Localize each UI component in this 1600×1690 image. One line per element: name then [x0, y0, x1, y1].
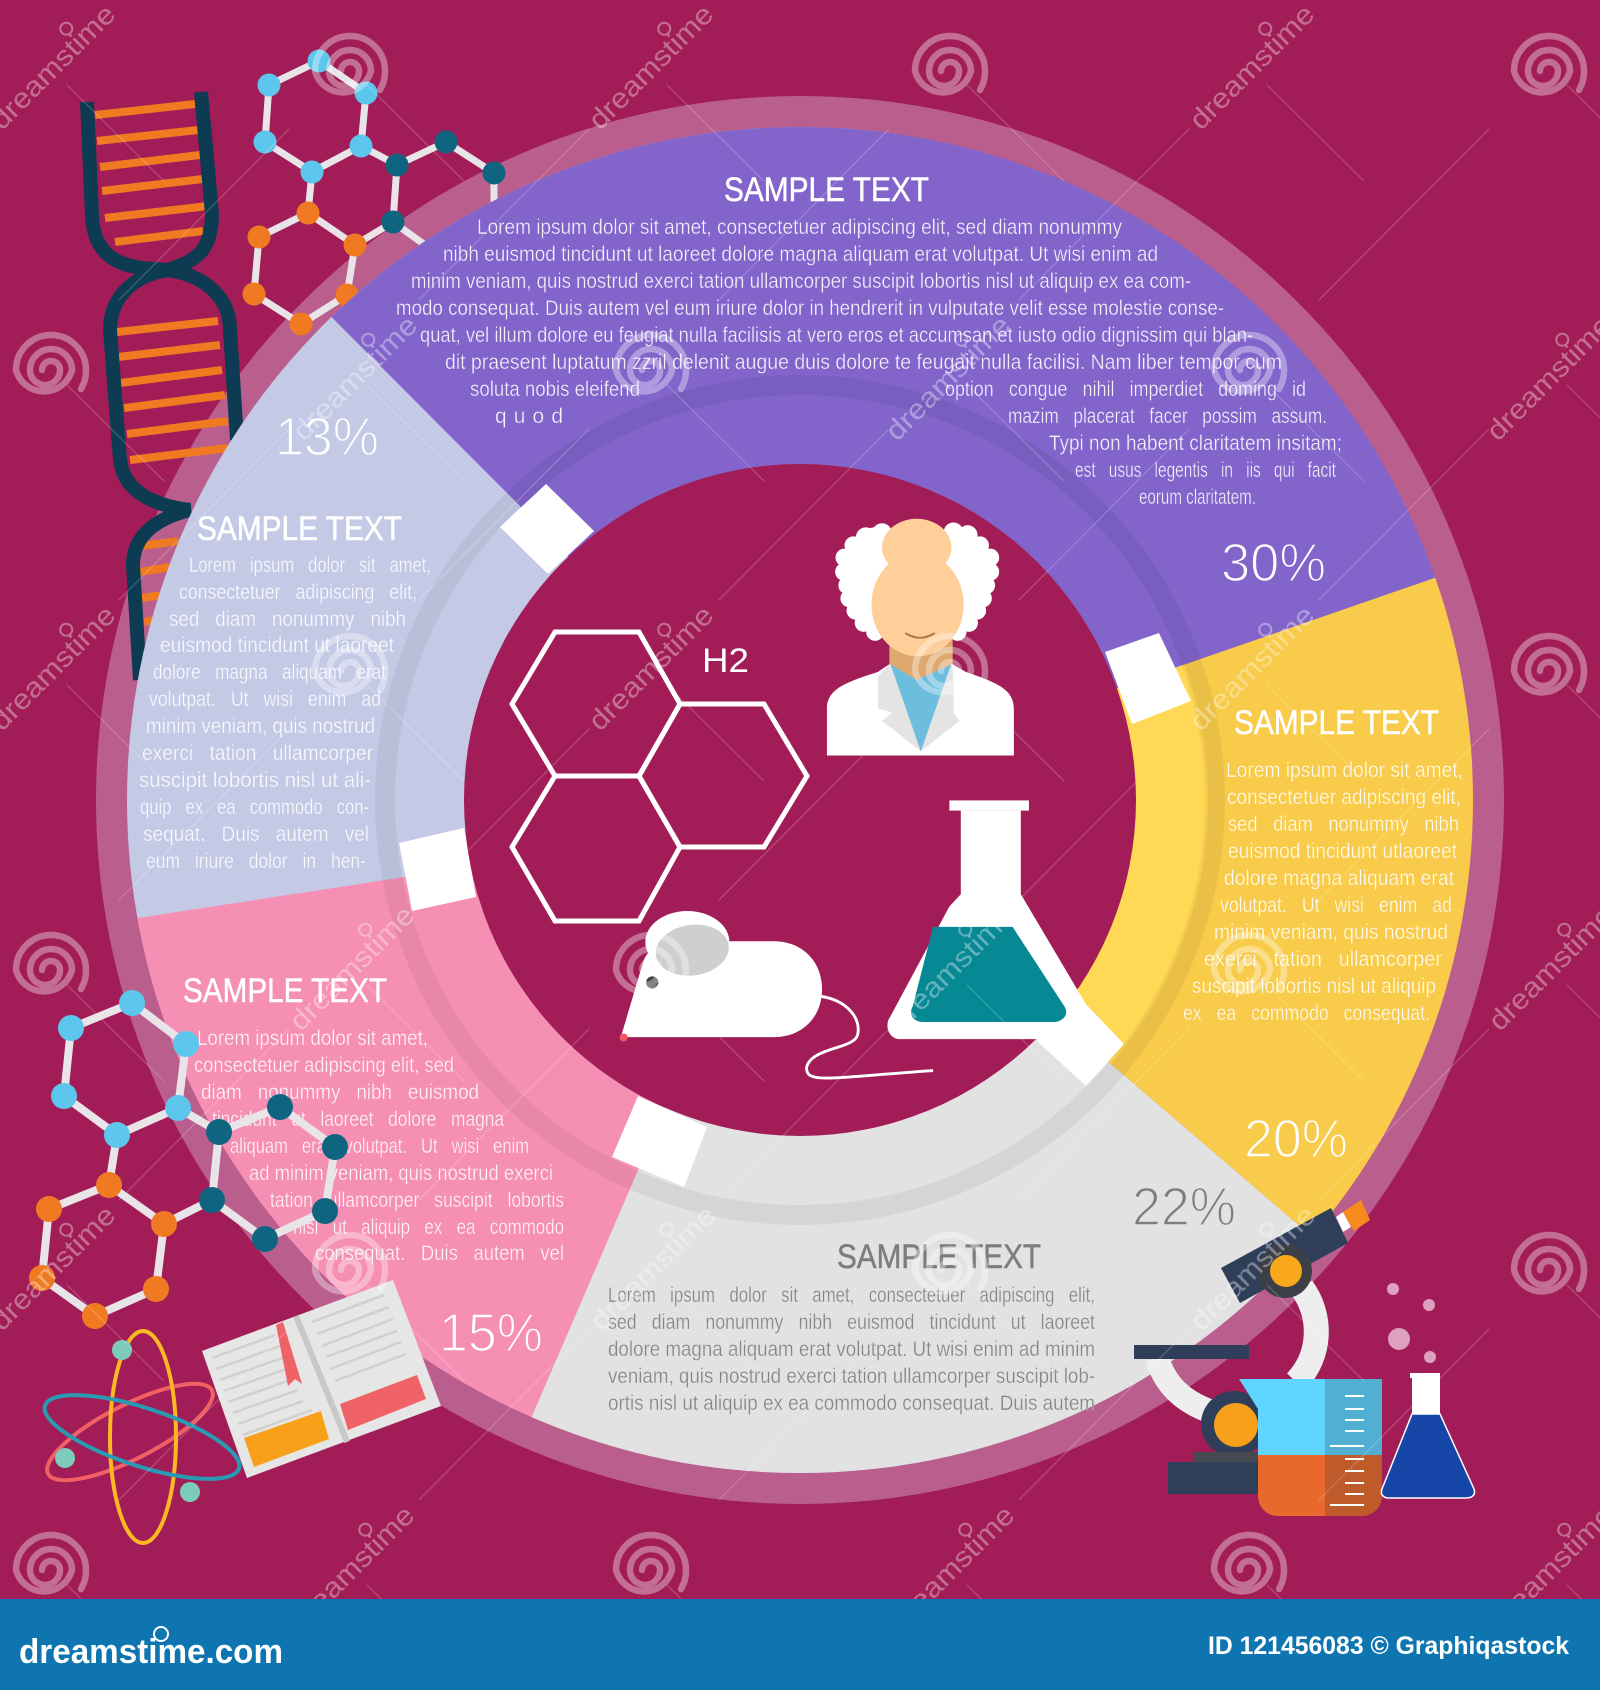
panel: yellow text	[1183, 704, 1463, 1169]
body text: eum iriure dolor in hen-	[146, 850, 366, 873]
body text: minim veniam, quis nostrud	[1214, 921, 1448, 944]
body text: consectetuer adipiscing elit,	[179, 581, 417, 604]
icon: book	[202, 1280, 441, 1478]
body text: ad minim veniam, quis nostrud exerci	[249, 1162, 553, 1185]
body text: nisl ut aliquip ex ea commodo	[293, 1216, 564, 1239]
body text: suscipit lobortis nisl ut aliquip	[1192, 975, 1436, 998]
body text: dolore magna aliquam erat volutpat. Ut wisi enim ad minim	[608, 1338, 1095, 1361]
percentage 22%: 22%	[1132, 1177, 1236, 1237]
center circle	[464, 464, 1136, 1136]
body text: option congue nihil imperdiet doming id	[945, 378, 1306, 401]
percentage 20%: 20%	[1244, 1109, 1348, 1169]
heading: SAMPLE TEXT	[183, 972, 387, 1010]
segment: gray 22%	[532, 1039, 1299, 1473]
body text: Lorem ipsum dolor sit amet, consectetuer adipiscing elit,	[608, 1284, 1095, 1307]
body text: veniam, quis nostrud exerci tation ullamcorper suscipit lob-	[608, 1365, 1095, 1388]
body text: suscipit lobortis nisl ut ali-	[139, 769, 371, 792]
heading: SAMPLE TEXT	[724, 171, 929, 209]
panel: purple text	[396, 171, 1342, 593]
body text: dolore magna aliquam erat	[1224, 867, 1454, 890]
body text: est usus legentis in iis qui facit	[1075, 459, 1336, 482]
body text	[608, 1284, 1095, 1415]
body text	[194, 1027, 564, 1265]
body text: euismod tincidunt ut laoreet	[160, 634, 394, 657]
separator: yellow gray	[1037, 996, 1124, 1086]
percentage 13%: 13%	[275, 407, 379, 467]
inner band	[385, 385, 1215, 1215]
body text: mazim placerat facer possim assum.	[1008, 405, 1327, 428]
body text: sequat. Duis autem vel	[143, 823, 369, 846]
body text: consequat. Duis autem vel	[315, 1242, 564, 1265]
body text: sed diam nonummy nibh	[169, 608, 406, 631]
body text: quat, vel illum dolore eu feugiat nulla facilisis at vero eros et accumsan et iusto odio dignissim qui blan-	[420, 324, 1253, 347]
body text: modo consequat. Duis autem vel eum iriure dolor in hendrerit in vulputate velit esse molestie conse-	[396, 297, 1224, 320]
body text: dit praesent luptatum zzril delenit augue duis dolore te feugait nulla facilisi. Nam liber tempor cum	[445, 351, 1282, 374]
panel: lavender text	[139, 407, 431, 873]
panel: gray text	[608, 1177, 1236, 1415]
body text: ortis nisl ut aliquip ex ea commodo consequat. Duis autem	[608, 1392, 1095, 1415]
body text: tation ullamcorper suscipit lobortis	[270, 1189, 564, 1212]
body text: soluta nobis eleifend	[470, 378, 640, 401]
outer ring	[96, 96, 1504, 1504]
body text	[1183, 759, 1463, 1025]
footer logo: dreamstime.com	[19, 1633, 283, 1671]
panel: pink text	[183, 972, 564, 1363]
body text: minim veniam, quis nostrud	[146, 715, 375, 738]
icon: blue flask	[1381, 1283, 1475, 1498]
heading: SAMPLE TEXT	[1234, 704, 1439, 742]
body text: quip ex ea commodo con-	[140, 796, 369, 819]
body text: q u o d	[495, 405, 563, 428]
heading: SAMPLE TEXT	[197, 510, 402, 548]
body text: exerci tation ullamcorper	[142, 742, 373, 765]
body text: diam nonummy nibh euismod	[201, 1081, 479, 1104]
segment: purple 30%	[332, 127, 1436, 688]
body text: consectetuer adipiscing elit,	[1227, 786, 1461, 809]
body text: ex ea commodo consequat.	[1183, 1002, 1430, 1025]
percentage 15%: 15%	[439, 1303, 543, 1363]
percentage 30%: 30%	[1221, 533, 1326, 593]
separator: purple yellow	[1105, 633, 1191, 724]
separator: gray pink	[612, 1096, 707, 1187]
body text: dolore magna aliquam erat	[153, 661, 386, 684]
heading: SAMPLE TEXT	[837, 1238, 1041, 1276]
icon: microscope	[1134, 1200, 1370, 1494]
segment: yellow 20%	[1108, 578, 1473, 1226]
body text: volutpat. Ut wisi enim ad	[1220, 894, 1452, 917]
separator: lavender purple	[500, 484, 594, 574]
body text: aliquam erat volutpat. Ut wisi enim	[230, 1135, 529, 1158]
footer id: ID 121456083 © Graphiqastock	[1208, 1632, 1569, 1660]
chart: donut segments	[127, 127, 1473, 1473]
separator: pink lavender	[399, 828, 476, 911]
icon: DNA helix	[87, 92, 237, 680]
body text: Lorem ipsum dolor sit amet,	[197, 1027, 428, 1050]
body text	[139, 554, 431, 873]
icon: beaker	[1239, 1379, 1382, 1516]
footer bar	[0, 1599, 1600, 1690]
icon: scientist	[827, 519, 1014, 756]
body text: nibh euismod tincidunt ut laoreet dolore magna aliquam erat volutpat. Ut wisi enim ad	[443, 243, 1158, 266]
body text: Lorem ipsum dolor sit amet,	[189, 554, 431, 577]
icon: atom	[36, 1331, 248, 1543]
body text	[396, 216, 1342, 509]
icon: molecule top left	[242, 50, 506, 336]
segment: lavender 13%	[127, 127, 900, 1000]
body text: tincidunt ut laoreet dolore magna	[212, 1108, 504, 1131]
body text: minim veniam, quis nostrud exerci tation ullamcorper suscipit lobortis nisl ut aliquip ex ea com-	[411, 270, 1191, 293]
icon: mouse	[620, 911, 933, 1078]
body text: consectetuer adipiscing elit, sed	[194, 1054, 454, 1077]
body text: Lorem ipsum dolor sit amet, consectetuer adipiscing elit, sed diam nonummy	[477, 216, 1122, 239]
body text: Lorem ipsum dolor sit amet,	[1226, 759, 1463, 782]
icon: molecule bottom left	[29, 990, 348, 1329]
body text: euismod tincidunt utlaoreet	[1228, 840, 1457, 863]
segment: pink 15%	[138, 864, 666, 1417]
body text: Typi non habent claritatem insitam;	[1049, 432, 1342, 455]
footer logo swirl	[154, 1627, 168, 1641]
segment: yellow inner tint	[1078, 664, 1208, 1064]
body text: volutpat. Ut wisi enim ad	[149, 688, 381, 711]
body text: sed diam nonummy nibh euismod tincidunt ut laoreet	[608, 1311, 1095, 1334]
icon: flask	[887, 800, 1092, 1039]
body text: eorum claritatem.	[1139, 486, 1256, 509]
icon: H2 hexagons	[512, 632, 807, 921]
body text: exerci tation ullamcorper	[1204, 948, 1442, 971]
body text: sed diam nonummy nibh	[1228, 813, 1459, 836]
label H2: H2	[702, 642, 749, 680]
